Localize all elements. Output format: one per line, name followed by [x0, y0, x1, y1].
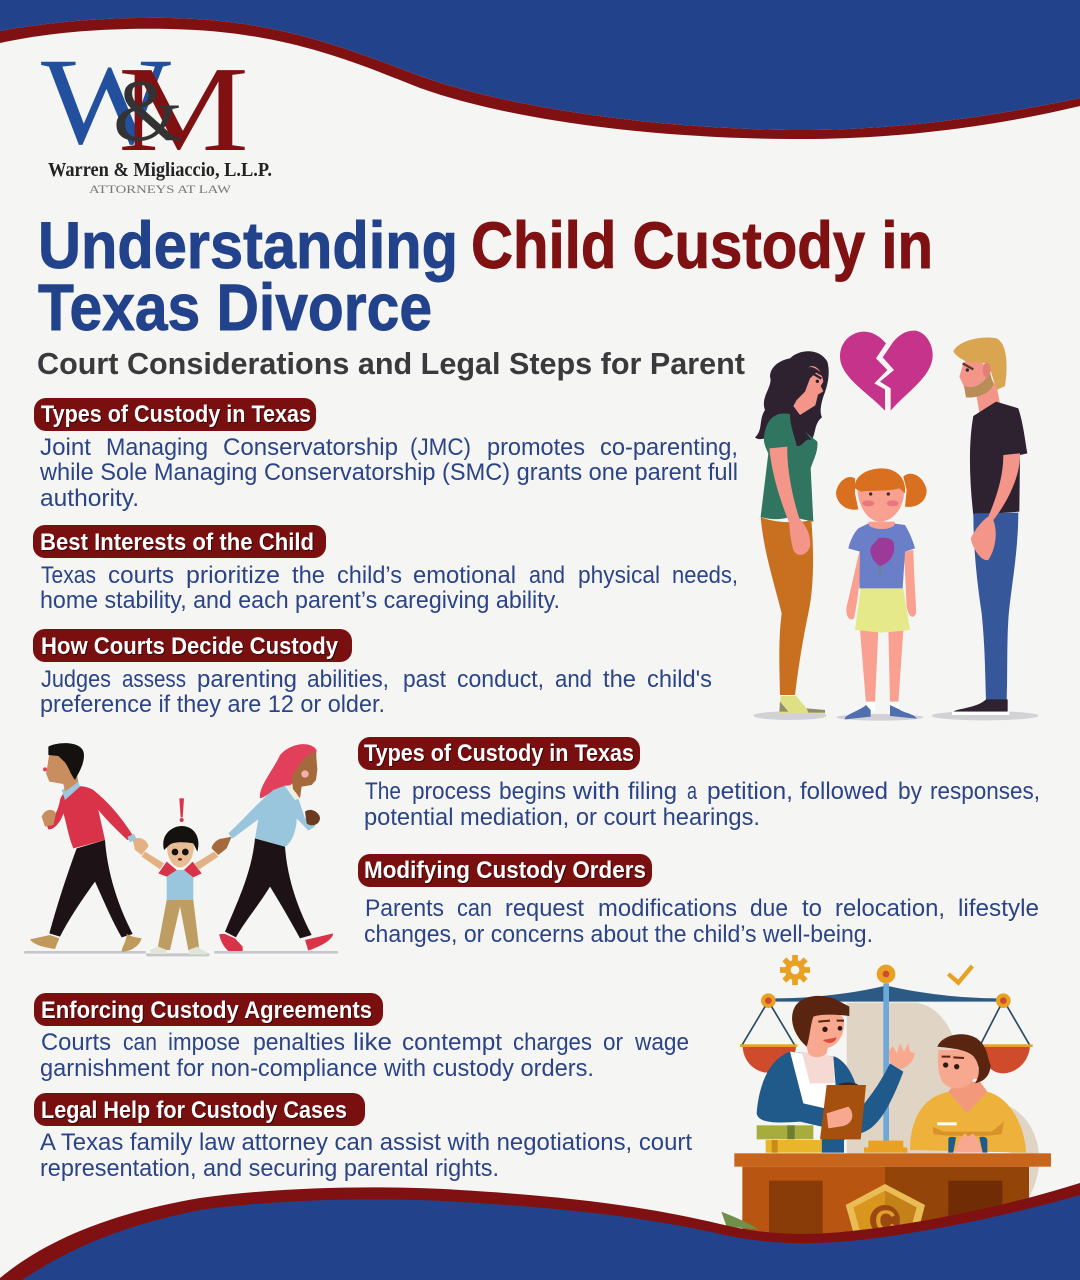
section: Types of Custody in Texas (process): a [687, 778, 697, 805]
section: Types of Custody in Texas (process): by [898, 778, 922, 805]
section: Types of Custody in Texas (process) [358, 737, 1040, 831]
illustration: parents walking apart holding child's hands [24, 743, 338, 956]
section: Best Interests of the Child: Texas [41, 562, 96, 589]
section: How Courts Decide Custody: How Courts Decide Custody [41, 633, 339, 660]
section: Modifying Custody Orders: request [505, 895, 584, 922]
title: Child Custody in [471, 208, 933, 282]
section: Best Interests of the Child: needs, [672, 562, 738, 589]
figure: mother [755, 351, 829, 714]
section: How Courts Decide Custody: the [603, 666, 636, 693]
logo: Warren & Migliaccio: ATTORNEYS AT LAW [89, 182, 232, 196]
section: Enforcing Custody Agreements: garnishment for non-compliance with custody orders. [40, 1055, 594, 1082]
bottom wave: navy and red footer band [0, 1183, 1080, 1280]
section: Best Interests of the Child: home stability, and each parent’s caregiving ability. [40, 587, 560, 614]
section: Enforcing Custody Agreements: charges [513, 1029, 592, 1056]
section: Enforcing Custody Agreements: can [123, 1029, 157, 1056]
section: Best Interests of the Child: emotional [413, 562, 516, 589]
section: Modifying Custody Orders: due [750, 895, 788, 922]
section: Legal Help for Custody Cases: A Texas family law attorney can assist with negotiations, court [40, 1129, 692, 1156]
section: Modifying Custody Orders: Modifying Custody Orders [364, 857, 646, 884]
section: Legal Help for Custody Cases [34, 1093, 692, 1182]
icon: broken heart [840, 331, 933, 411]
section: Modifying Custody Orders [358, 854, 1039, 948]
desk [721, 1153, 1051, 1250]
section: Types of Custody in Texas (process): responses, [930, 778, 1040, 805]
illustration: lawyer and client at desk with scales [721, 955, 1051, 1250]
section: Modifying Custody Orders: Parents [365, 895, 444, 922]
logo: Warren & Migliaccio: Warren & Migliaccio, L.L.P. [48, 159, 272, 181]
section: Types of Custody in Texas (process): process [412, 778, 491, 805]
figure: child [142, 798, 218, 955]
top wave: navy and red header band [0, 0, 1080, 139]
section: Types of Custody in Texas (JMC/SMC): co-parenting, [600, 434, 738, 461]
section: Types of Custody in Texas (process): with [572, 778, 620, 805]
figure: daughter [836, 468, 927, 719]
section: Enforcing Custody Agreements: contempt [402, 1029, 502, 1056]
figure: mother walking [212, 744, 333, 951]
section: Modifying Custody Orders: modifications [598, 895, 737, 922]
logo: Warren & Migliaccio: M [118, 42, 249, 177]
section: Types of Custody in Texas (JMC/SMC): while Sole Managing Conservatorship (SMC) grants one parent full [39, 459, 738, 486]
section: Types of Custody in Texas (process): potential mediation, or court hearings. [364, 804, 760, 831]
section: Enforcing Custody Agreements: like [353, 1029, 392, 1056]
section: Modifying Custody Orders: can [457, 895, 492, 922]
section: Legal Help for Custody Cases: representation, and securing parental rights. [40, 1155, 499, 1182]
subtitle: Court Considerations and Legal Steps for Parent [37, 346, 745, 381]
section: Types of Custody in Texas (process): Types of Custody in Texas [364, 740, 634, 767]
logo: Warren & Migliaccio: W [41, 33, 171, 170]
section: How Courts Decide Custody: Judges [41, 666, 111, 693]
section: Types of Custody in Texas (JMC/SMC) [34, 398, 738, 512]
section: Modifying Custody Orders: lifestyle [958, 895, 1039, 922]
section: Enforcing Custody Agreements: impose [168, 1029, 240, 1056]
section: How Courts Decide Custody [33, 629, 712, 718]
section: How Courts Decide Custody: abilities, [307, 666, 389, 693]
section: Best Interests of the Child: and [529, 562, 565, 589]
figure: father [952, 337, 1027, 715]
section: How Courts Decide Custody: assess [122, 666, 186, 693]
section: Types of Custody in Texas (JMC/SMC): Managing [106, 434, 208, 461]
section: How Courts Decide Custody: conduct, [457, 666, 544, 693]
section: Enforcing Custody Agreements: wage [634, 1029, 689, 1056]
section: Enforcing Custody Agreements: penalties [253, 1029, 345, 1056]
section: Best Interests of the Child: prioritize [186, 562, 280, 589]
title: Understanding [38, 208, 458, 282]
section: How Courts Decide Custody: parenting [197, 666, 297, 693]
section: How Courts Decide Custody: preference if they are 12 or older. [40, 691, 385, 718]
section: Types of Custody in Texas (JMC/SMC): Types of Custody in Texas [41, 401, 311, 428]
desk: C [875, 1206, 896, 1238]
section: Best Interests of the Child [33, 525, 738, 614]
icon: scales of justice [740, 965, 1033, 1153]
section: Types of Custody in Texas (JMC/SMC): Joint [40, 434, 91, 461]
section: Enforcing Custody Agreements [34, 993, 689, 1082]
section: Enforcing Custody Agreements: or [603, 1029, 623, 1056]
figure: lawyer [757, 996, 915, 1153]
section: Types of Custody in Texas (JMC/SMC): Conservatorship [223, 434, 398, 461]
section: Legal Help for Custody Cases: Legal Help for Custody Cases [41, 1097, 347, 1124]
section: Enforcing Custody Agreements: Enforcing Custody Agreements [41, 997, 372, 1024]
section: Types of Custody in Texas (process): followed [800, 778, 888, 805]
section: Types of Custody in Texas (process): The [365, 778, 401, 805]
icon: gear [780, 955, 810, 985]
section: Types of Custody in Texas (process): begins [499, 778, 566, 805]
logo: Warren & Migliaccio [41, 33, 272, 196]
section: Modifying Custody Orders: relocation, [835, 895, 945, 922]
section: Enforcing Custody Agreements: Courts [41, 1029, 111, 1056]
icon: check mark [948, 966, 972, 983]
title [38, 208, 933, 344]
figure: father walking [30, 743, 148, 952]
section: Best Interests of the Child: Best Interests of the Child [40, 529, 314, 556]
section: Best Interests of the Child: the [292, 562, 325, 589]
figure: client [910, 1034, 1026, 1153]
section: Types of Custody in Texas (process): filing [628, 778, 677, 805]
section: Modifying Custody Orders: changes, or concerns about the child’s well-being. [364, 921, 873, 948]
section: Types of Custody in Texas (JMC/SMC): (JMC) [410, 434, 471, 461]
section: Best Interests of the Child: courts [108, 562, 174, 589]
section: Types of Custody in Texas (JMC/SMC): promotes [487, 434, 585, 461]
section: Modifying Custody Orders: to [802, 895, 822, 922]
logo: Warren & Migliaccio: & [113, 63, 183, 160]
illustration: arguing parents with child and broken heart [753, 331, 1038, 721]
section: Types of Custody in Texas (JMC/SMC): authority. [40, 485, 139, 512]
section: How Courts Decide Custody: child's [647, 666, 712, 693]
section: How Courts Decide Custody: and [555, 666, 592, 693]
title: Texas Divorce [38, 270, 432, 344]
section: How Courts Decide Custody: past [403, 666, 446, 693]
section: Best Interests of the Child: physical [578, 562, 660, 589]
section: Best Interests of the Child: child’s [337, 562, 402, 589]
section: Types of Custody in Texas (process): petition, [707, 778, 793, 805]
